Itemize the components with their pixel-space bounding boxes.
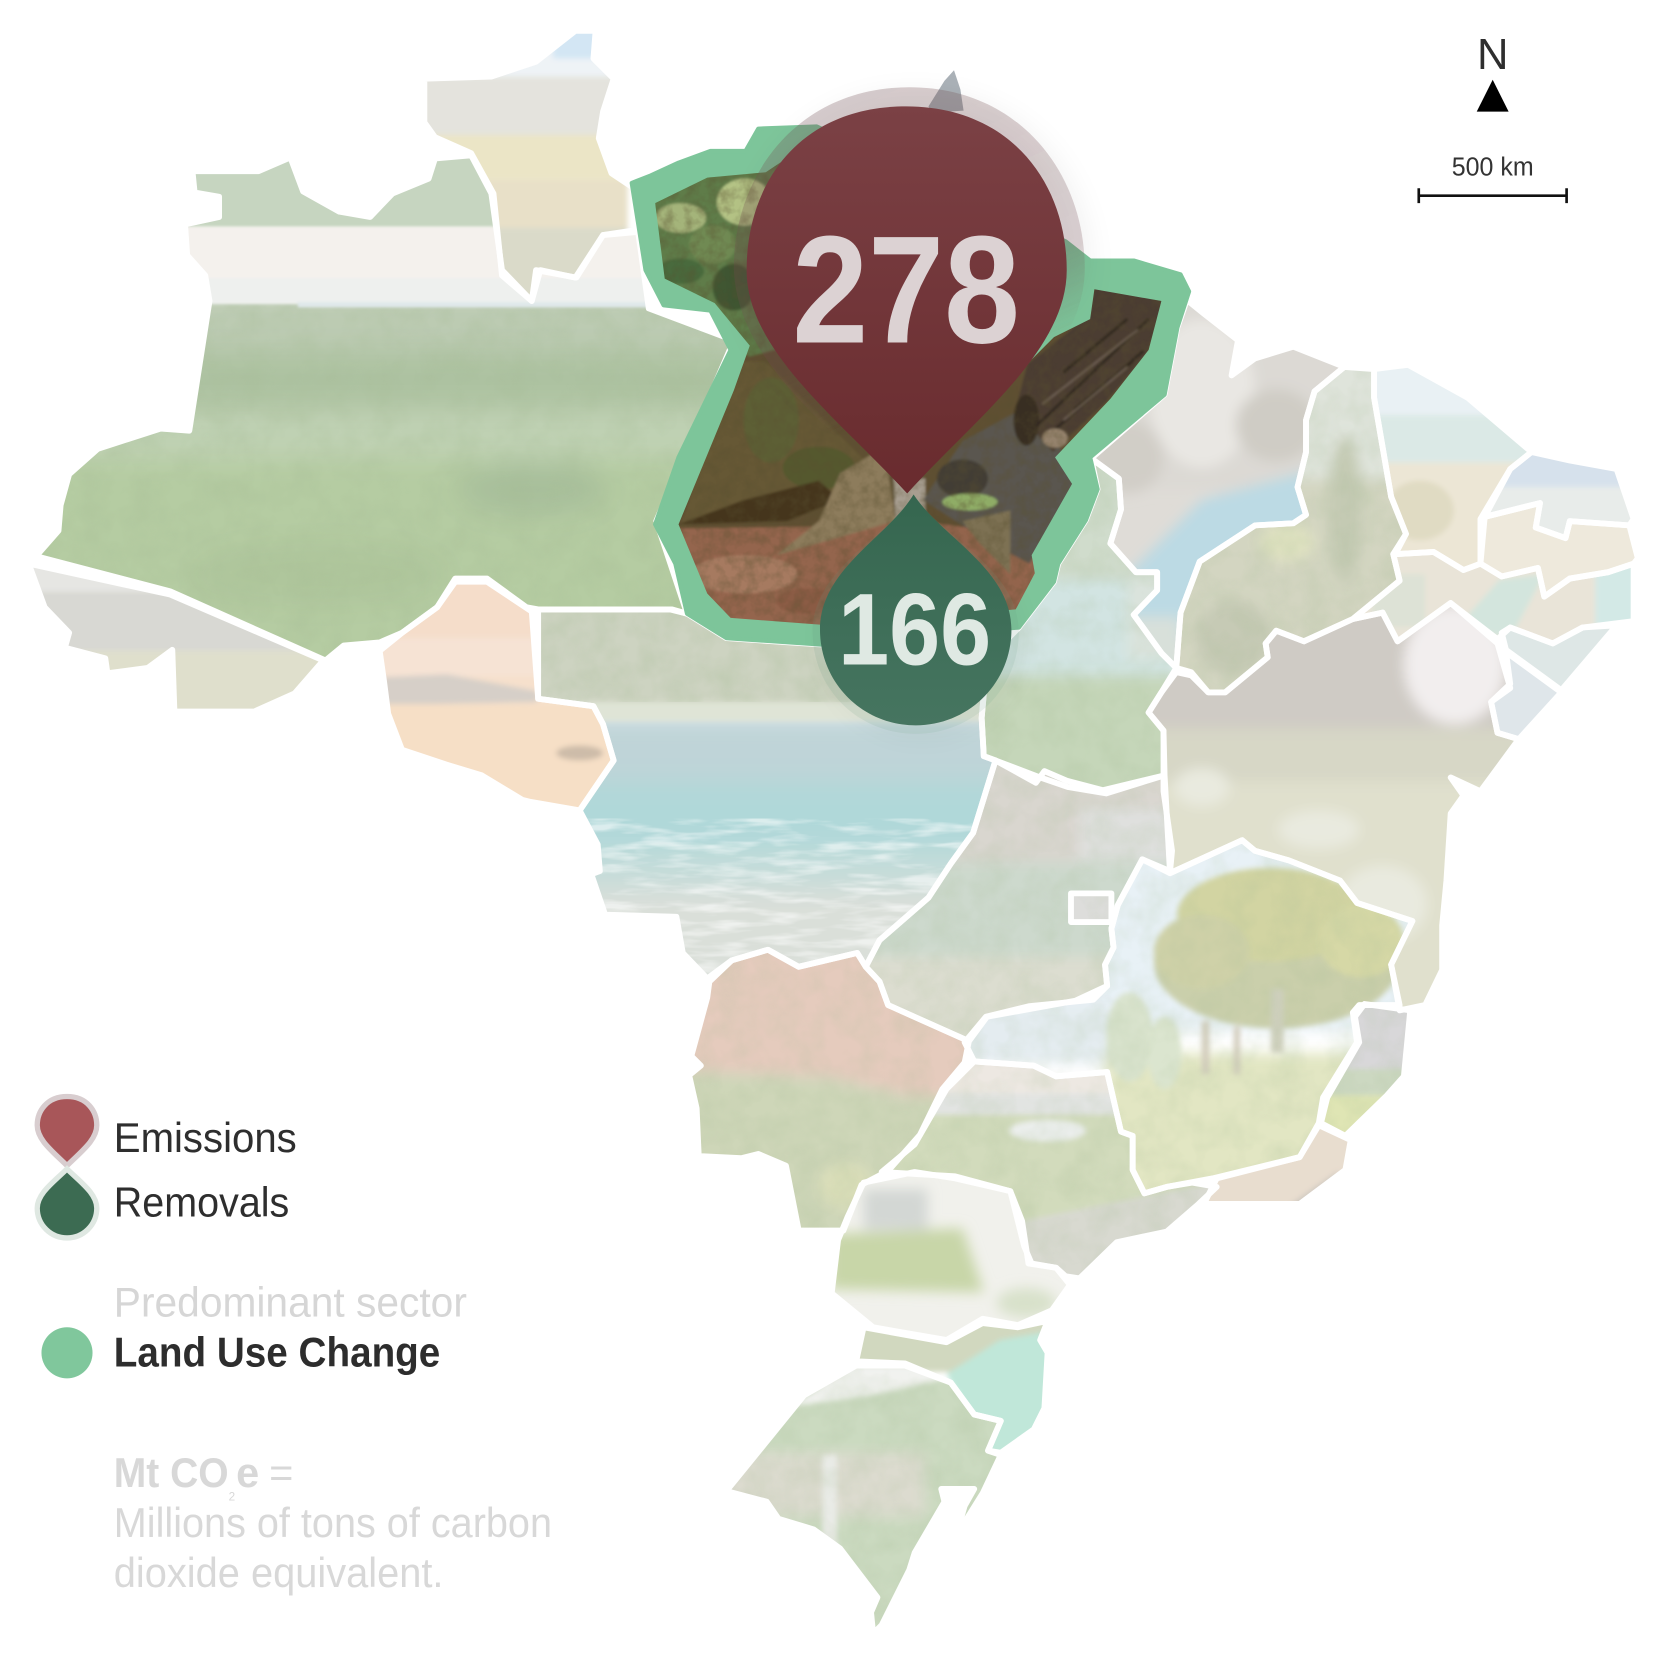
pin halo — [813, 495, 1019, 734]
state: Ceará — [1377, 368, 1527, 567]
note: unit definition: Mt CO — [114, 1449, 229, 1496]
label: Land Use Change — [114, 1329, 440, 1376]
pin body — [747, 106, 1067, 493]
value: 278 — [792, 204, 1020, 375]
note: unit definition: e — [236, 1449, 259, 1496]
state: Acre — [34, 568, 318, 709]
state: Bahia — [1152, 607, 1514, 1006]
state: Goiás — [870, 765, 1167, 1036]
heading: Predominant sector — [114, 1279, 467, 1326]
state: Rio Grande do Norte — [1490, 455, 1630, 534]
scale bar: 500 km — [1452, 153, 1534, 181]
state: Rio de Janeiro — [1208, 1129, 1348, 1201]
state: Roraima — [427, 34, 630, 294]
state: Santa Catarina — [860, 1325, 1045, 1450]
state: Amapá — [928, 70, 964, 113]
state: Minas Gerais — [970, 844, 1408, 1190]
removals pin: 166 — [813, 495, 1019, 734]
state: São Paulo — [893, 1064, 1208, 1276]
state: Paraíba — [1484, 507, 1634, 592]
state: Paraná — [834, 1176, 1066, 1337]
north arrow — [1477, 31, 1509, 112]
note: unit definition: 2 — [229, 1491, 235, 1504]
state: Alagoas — [1506, 628, 1610, 686]
label: Emissions — [114, 1114, 297, 1161]
value: 166 — [838, 573, 991, 687]
state: Rio Grande do Sul — [732, 1368, 997, 1627]
state: Federal District — [1074, 896, 1108, 919]
state photograph — [655, 162, 1162, 625]
note: unit definition — [114, 1449, 552, 1596]
note: unit definition: dioxide equivalent. — [114, 1549, 443, 1596]
state: Sergipe — [1494, 658, 1557, 736]
state: Maranhão — [1096, 305, 1338, 661]
icon: emissions drop — [37, 1097, 97, 1166]
legend: removals — [37, 1169, 289, 1238]
legend: emissions — [37, 1097, 297, 1166]
note: unit definition: = — [269, 1449, 293, 1496]
map texture — [702, 372, 1406, 1540]
label: Removals — [114, 1179, 289, 1226]
icon: land use change dot — [41, 1327, 93, 1378]
pin body — [820, 495, 1011, 725]
legend: predominant sector — [41, 1279, 467, 1378]
state: Mato Grosso do Sul — [692, 953, 964, 1228]
state outline — [632, 127, 1189, 645]
north arrow: N — [1477, 31, 1508, 79]
note: unit definition: Millions of tons of carbon — [114, 1499, 552, 1546]
state: Pernambuco — [1364, 555, 1631, 640]
state: Espírito Santo — [1324, 1008, 1407, 1132]
state: Mato Grosso — [541, 612, 992, 974]
state: Rondônia — [382, 584, 610, 808]
state: Amazonas — [42, 158, 728, 657]
scale bar — [1419, 153, 1567, 203]
state: Tocantins — [984, 466, 1172, 788]
state: Piauí — [1180, 370, 1402, 690]
emissions pin: 278 — [734, 87, 1085, 493]
icon: removals drop — [37, 1169, 97, 1238]
highlighted state: Pará with Land Use Change outline — [632, 127, 1191, 645]
pin halo — [734, 87, 1085, 441]
